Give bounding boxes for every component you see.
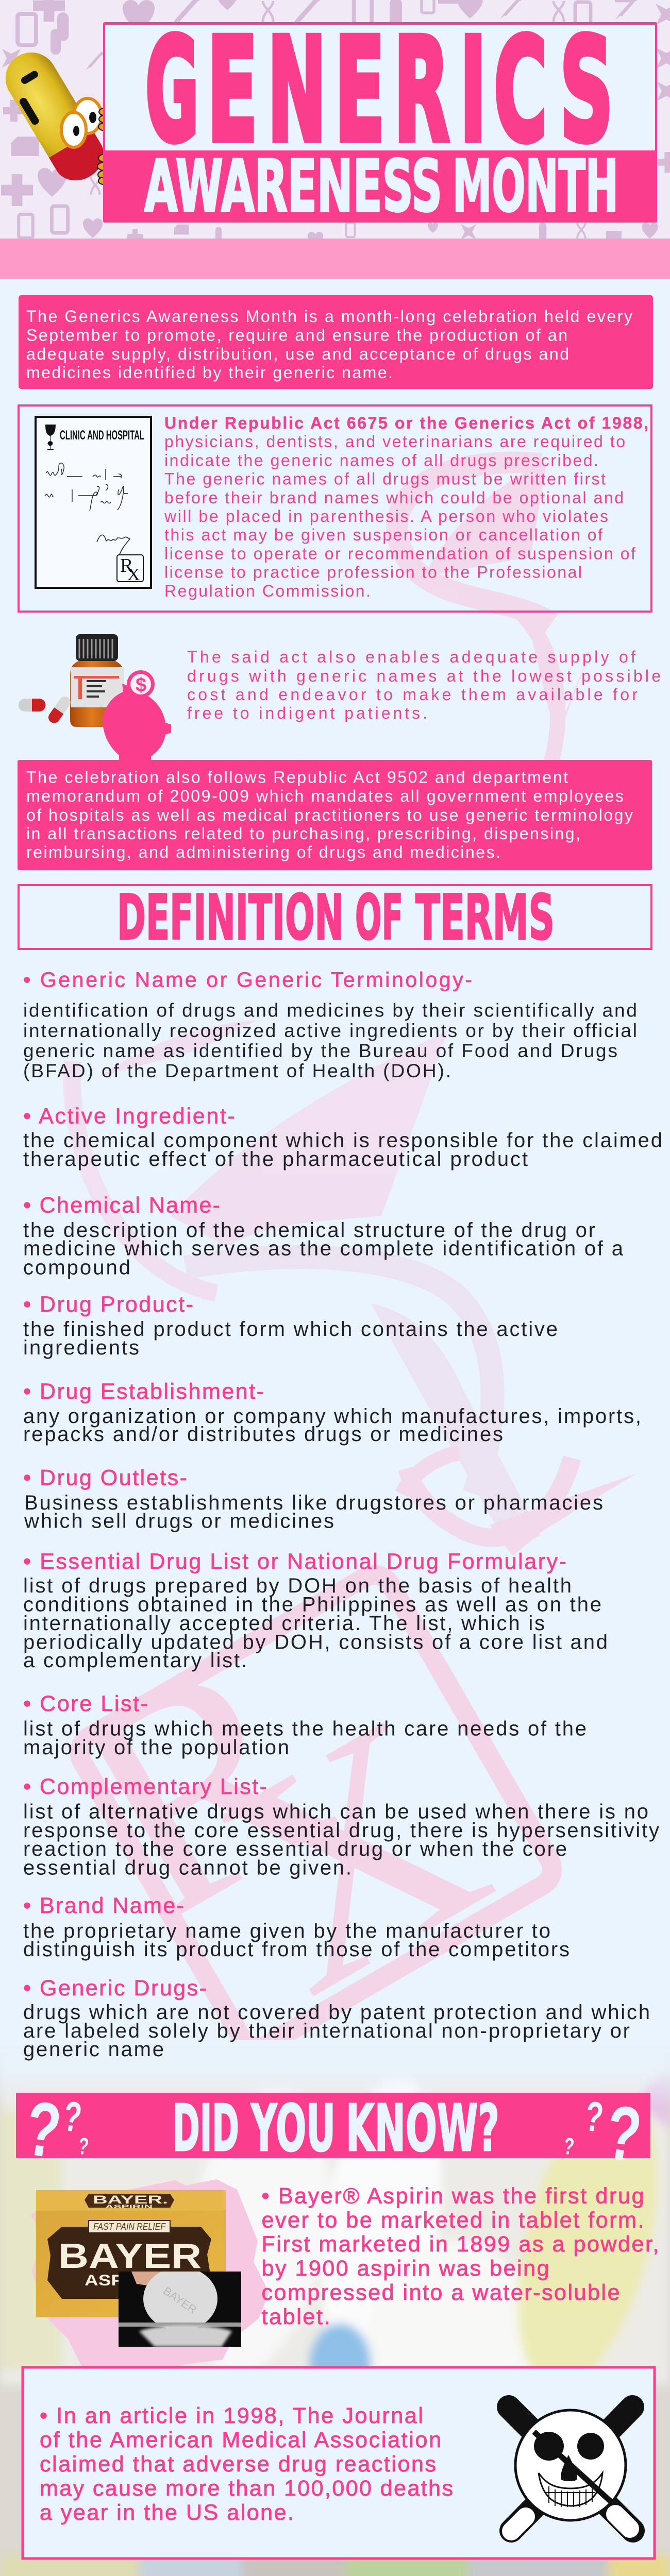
definition: Core List: majority of the population xyxy=(23,1736,289,1759)
text: Bayer aspirin fact: tablet. xyxy=(262,2304,330,2329)
definition: Complementary List xyxy=(23,1774,659,1879)
definition: Brand Name: • Brand Name- xyxy=(23,1893,184,1918)
watermark: Rx box: X xyxy=(170,1650,534,2058)
panel: Republic Act 9502: The celebration also follows Republic Act 9502 and department xyxy=(26,768,568,787)
text: said act: drugs with generic names at the lowest possible xyxy=(187,667,661,685)
definition: Generic Name: internationally recognized active ingredients or by their official xyxy=(23,1020,637,1041)
definition: Brand Name xyxy=(23,1893,569,1961)
panel: Republic Act 6675: before their brand names which could be optional and xyxy=(164,488,624,507)
definition: Core List: list of drugs which meets the health care needs of the xyxy=(23,1718,587,1740)
panel: Republic Act 6675: The generic names of all drugs must be written first xyxy=(164,470,606,488)
image: Bayer aspirin box and tablet: BAYER. xyxy=(93,2193,168,2206)
definition: Chemical Name: medicine which serves as the complete identification of a xyxy=(23,1238,624,1260)
image: Bayer aspirin box and tablet xyxy=(31,2179,269,2375)
panel: adverse drug reactions fact: may cause more than 100,000 deaths xyxy=(40,2476,453,2501)
icon: prescription sheet: CLINIC AND HOSPITAL xyxy=(60,428,144,443)
panel: intro pink box: The Generics Awareness Month is a month-long celebration held every xyxy=(26,307,632,326)
definition: Active Ingredient: • Active Ingredient- xyxy=(23,1104,235,1129)
definition: Drug Outlets: • Drug Outlets- xyxy=(23,1466,187,1490)
panel: Republic Act 6675: physicians, dentists, and veterinarians are required to xyxy=(164,432,625,451)
definition: Drug Establishment: any organization or company which manufactures, imports, xyxy=(23,1405,641,1428)
title: GENERICS: E xyxy=(334,8,385,174)
watermark: Rx box xyxy=(23,1568,559,2058)
definition: Drug Establishment: • Drug Establishment- xyxy=(23,1379,264,1404)
definition: Generic Drugs xyxy=(23,1976,650,2061)
panel: Republic Act 6675: indicate the generic names of all drugs prescribed. xyxy=(164,451,598,470)
definition: Generic Name xyxy=(23,968,637,1081)
definition: Generic Drugs: are labeled solely by their international non-proprietary or xyxy=(23,2020,630,2042)
panel: Republic Act 9502: memorandum of 2009-009 which mandates all government employees xyxy=(26,787,624,805)
text: Bayer aspirin fact: by 1900 aspirin was being xyxy=(262,2256,549,2281)
text: said act: free to indigent patients. xyxy=(187,704,427,722)
panel: adverse drug reactions fact: a year in the US alone. xyxy=(40,2500,294,2525)
heading: Definition of Terms xyxy=(19,882,651,954)
definition: Drug Outlets xyxy=(23,1466,603,1533)
definition: Drug Establishment: repacks and/or distributes drugs or medicines xyxy=(23,1423,503,1446)
definition: Drug Establishment xyxy=(23,1379,641,1446)
pink band xyxy=(0,239,670,279)
definition: Generic Drugs: drugs which are not covered by patent protection and which xyxy=(23,2001,650,2024)
panel: Republic Act 6675: Regulation Commission. xyxy=(164,582,371,600)
definition: Essential Drug List xyxy=(23,1549,608,1672)
definition: Generic Name: identification of drugs and medicines by their scientifically and xyxy=(23,1000,637,1021)
title block xyxy=(103,8,657,228)
panel: Republic Act 6675: Under Republic Act 6675 or the Generics Act of 1988, xyxy=(164,414,648,432)
definition: Active Ingredient: the chemical component which is responsible for the claimed xyxy=(23,1129,662,1152)
definition: Brand Name: distinguish its product from those of the competitors xyxy=(23,1938,569,1961)
panel: Republic Act 9502: in all transactions related to purchasing, prescribing, dispensing, xyxy=(26,824,580,843)
definition: Generic Drugs: generic name xyxy=(23,2038,164,2061)
panel: Republic Act 6675 xyxy=(19,405,651,612)
panel: adverse drug reactions fact: • In an article in 1998, The Journal xyxy=(40,2403,423,2428)
image: Bayer aspirin box and tablet: ASPIRIN xyxy=(85,2272,162,2289)
title: GENERICS: R xyxy=(394,8,449,174)
title: GENERICS: G xyxy=(145,8,199,174)
definition: Complementary List: essential drug cannot be given. xyxy=(23,1857,351,1879)
panel: Republic Act 6675: this act may be given suspension or cancellation of xyxy=(164,526,602,544)
image: Bayer aspirin box and tablet: BAYER xyxy=(58,2236,202,2276)
text: said act: The said act also enables adequate supply of xyxy=(187,648,635,666)
panel: Republic Act 9502: reimbursing, and administering of drugs and medicines. xyxy=(26,843,500,861)
definition: Active Ingredient: therapeutic effect of the pharmaceutical product xyxy=(23,1148,528,1171)
definition: Drug Outlets: Business establishments like drugstores or pharmacies xyxy=(24,1492,603,1514)
definition: Chemical Name xyxy=(23,1193,624,1279)
definition: Drug Product: the finished product form which contains the active xyxy=(23,1318,558,1341)
definition: Essential Drug List: conditions obtained in the Philippines as well as on the xyxy=(23,1594,601,1616)
header patterned background xyxy=(0,0,670,247)
mascot: yellow capsule character xyxy=(0,43,114,190)
definition: Essential Drug List: periodically updated by DOH, consists of a core list and xyxy=(23,1631,608,1653)
background watermark ribbon xyxy=(72,463,636,1556)
panel: adverse drug reactions fact: of the American Medical Association xyxy=(40,2428,441,2452)
panel: intro pink box: adequate supply, distribution, use and acceptance of drugs and xyxy=(26,345,569,363)
icon: prescription sheet: X xyxy=(127,565,140,584)
icon: piggy bank with coin: $ xyxy=(136,674,146,696)
title: GENERICS: S xyxy=(560,8,613,174)
title: GENERICS: E xyxy=(207,8,258,174)
panel: Republic Act 6675: license to operate or recommendation of suspension of xyxy=(164,544,635,563)
panel: intro pink box xyxy=(19,295,653,389)
panel: adverse drug reactions fact xyxy=(23,2367,655,2558)
definition: Drug Outlets: which sell drugs or medicines xyxy=(24,1510,334,1533)
definition: Brand Name: the proprietary name given by the manufacturer to xyxy=(23,1920,550,1942)
image: Bayer aspirin box and tablet: BAYER xyxy=(161,2284,199,2316)
definition: Generic Drugs: • Generic Drugs- xyxy=(23,1976,207,2001)
definition: Generic Name: (BFAD) of the Department of Health (DOH). xyxy=(23,1060,451,1081)
icon: skull and crossed pills xyxy=(509,2407,633,2531)
icon: question marks right: ? xyxy=(601,2089,646,2179)
icon: medicine bottle with pills xyxy=(19,634,124,727)
heading: Definition of Terms: OF xyxy=(355,882,403,954)
icon: question marks right: ? xyxy=(582,2092,606,2141)
definition: Complementary List: response to the core essential drug, there is hypersensitivity xyxy=(23,1819,659,1842)
text: Bayer aspirin fact: • Bayer® Aspirin was the first drug xyxy=(262,2183,644,2208)
definition: Complementary List: list of alternative drugs which can be used when there is no xyxy=(23,1800,648,1823)
text: Bayer aspirin fact: First marketed in 1899 as a powder, xyxy=(262,2232,659,2257)
icon: prescription sheet: R xyxy=(120,555,133,577)
definition: Drug Product: ingredients xyxy=(23,1336,139,1359)
text: said act xyxy=(187,648,661,722)
text: Bayer aspirin fact xyxy=(262,2183,659,2329)
panel: Republic Act 6675: license to practice profession to the Professional xyxy=(164,563,582,582)
definition: Core List: • Core List- xyxy=(23,1691,148,1716)
text: Bayer aspirin fact: ever to be marketed in tablet form. xyxy=(262,2208,644,2233)
text: Bayer aspirin fact: compressed into a water-soluble xyxy=(262,2280,619,2305)
panel: intro pink box: September to promote, require and ensure the production of an xyxy=(26,326,567,344)
icon: prescription sheet xyxy=(36,417,151,588)
icon: question marks right: ? xyxy=(562,2133,576,2160)
definition: Drug Product: • Drug Product- xyxy=(23,1292,193,1317)
icon: question marks left: ? xyxy=(77,2133,90,2160)
definition: Core List xyxy=(23,1691,587,1759)
heading: Definition of Terms: DEFINITION xyxy=(117,882,344,954)
definition: Essential Drug List: list of drugs prepared by DOH on the basis of health xyxy=(23,1574,572,1597)
heading: Did You Know: KNOW? xyxy=(346,2091,499,2166)
definition: Chemical Name: compound xyxy=(23,1256,130,1279)
definition: Drug Product xyxy=(23,1292,558,1359)
definition: Generic Name: generic name as identified by the Bureau of Food and Drugs xyxy=(23,1040,617,1061)
definition: Complementary List: reaction to the core essential drug or when the core xyxy=(23,1838,567,1860)
title: GENERICS: I xyxy=(460,8,487,174)
icon: question marks left: ? xyxy=(61,2092,85,2141)
heading: Did You Know: DID xyxy=(173,2091,239,2166)
image: Bayer aspirin box and tablet: ASPIRIN xyxy=(105,2204,153,2209)
heading: Did You Know: YOU xyxy=(250,2091,336,2166)
icon: question marks right xyxy=(562,2089,646,2179)
title: GENERICS: C xyxy=(494,8,547,174)
definition: Essential Drug List: • Essential Drug List or National Drug Formulary- xyxy=(23,1549,566,1574)
panel: Republic Act 9502: of hospitals as well as medical practitioners to use generic terminology xyxy=(26,806,633,824)
definition: Generic Name: • Generic Name or Generic Terminology- xyxy=(23,968,472,992)
definition: Chemical Name: • Chemical Name- xyxy=(23,1193,220,1218)
definition: Chemical Name: the description of the chemical structure of the drug or xyxy=(23,1219,595,1242)
subtitle: AWARENESS MONTH: AWARENESS xyxy=(144,145,442,228)
panel: Republic Act 6675: will be placed in parenthesis. A person who violates xyxy=(164,507,608,526)
watermark: Rx box: R xyxy=(23,1583,374,1984)
text: said act: cost and endeavor to make them available for xyxy=(187,685,638,704)
definition: Essential Drug List: internationally accepted criteria. The list, which is xyxy=(23,1612,545,1635)
definition: Essential Drug List: a complementary list. xyxy=(23,1649,247,1672)
definition: Complementary List: • Complementary List- xyxy=(23,1774,267,1799)
image: Bayer aspirin box and tablet: FAST PAIN RELIEF xyxy=(93,2222,166,2232)
panel: intro pink box: medicines identified by their generic name. xyxy=(26,363,393,382)
heading: Definition of Terms: TERMS xyxy=(415,882,555,954)
heading: Did You Know xyxy=(16,2084,650,2179)
icon: question marks left: ? xyxy=(21,2084,66,2175)
panel: Republic Act 9502 xyxy=(18,760,652,870)
icon: piggy bank with coin xyxy=(103,670,171,773)
definition: Active Ingredient xyxy=(23,1104,662,1171)
background photo of pills xyxy=(0,2040,670,2576)
panel: adverse drug reactions fact: claimed that adverse drug reactions xyxy=(40,2452,436,2477)
title: GENERICS: N xyxy=(267,8,326,174)
icon: question marks left xyxy=(21,2084,90,2175)
